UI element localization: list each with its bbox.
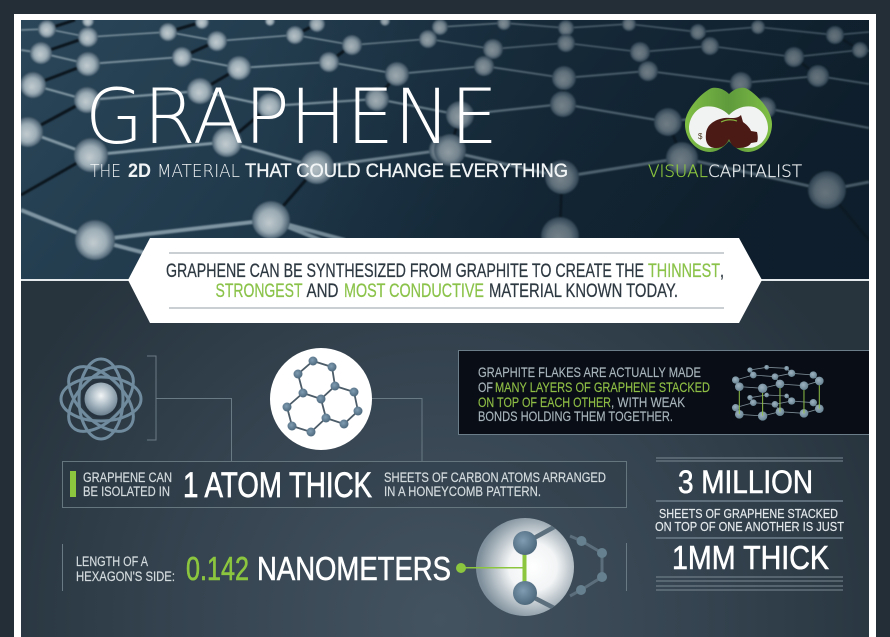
stat: 0.142 nanometers: NANOMETERS (257, 550, 451, 587)
subtitle (90, 161, 568, 182)
icon: stacked graphite layers (732, 365, 824, 421)
hexagon side label: HEXAGON'S SIDE: (76, 569, 175, 584)
callout text: ON TOP OF EACH OTHER (478, 394, 611, 410)
banner statement text: MOST CONDUCTIVE (344, 280, 484, 302)
stat: 0.142 nanometers: 0.142 (186, 550, 249, 587)
side rule (62, 543, 626, 591)
divider line (21, 279, 869, 281)
logo: Visual Capitalist binoculars with piggy bank (685, 88, 772, 152)
logo wordmark: VISUAL (648, 162, 708, 182)
stat panel: 3 million sheets: 3 MILLION (678, 464, 813, 500)
stat panel: 3 million sheets: ON TOP OF ONE ANOTHER IS JUST (655, 519, 844, 534)
box: 1 atom thick (62, 462, 626, 508)
stat panel: 3 million sheets (655, 458, 844, 590)
stat: 0.142 nanometers (186, 550, 451, 587)
pointer: measurement line and dot (456, 563, 523, 573)
right label: IN A HONEYCOMB PATTERN. (384, 484, 541, 499)
banner (128, 238, 762, 323)
right label (384, 470, 606, 499)
hexagon side label: LENGTH OF A (76, 554, 148, 569)
callout text: , WITH WEAK (611, 394, 686, 410)
banner statement text: THINNEST (648, 260, 720, 282)
green accent bar (70, 471, 76, 497)
connector: honeycomb to thickness box (372, 398, 422, 461)
banner statement text: STRONGEST (216, 280, 303, 302)
stat panel: 3 million sheets: SHEETS OF GRAPHENE STACKED (659, 506, 838, 521)
right label: SHEETS OF CARBON ATOMS ARRANGED (384, 470, 606, 485)
icon: magnified carbon bond lens (476, 518, 574, 616)
callout: graphite flakes (458, 350, 869, 434)
subtitle: MATERIAL (157, 161, 240, 182)
big stat: 1 ATOM THICK (183, 466, 372, 505)
title: GRAPHENE (85, 72, 498, 161)
callout text: BONDS HOLDING THEM TOGETHER. (478, 408, 673, 424)
icon: honeycomb molecule (270, 348, 372, 450)
subtitle: THAT COULD CHANGE EVERYTHING (245, 161, 568, 182)
logo wordmark: CAPITALIST (708, 162, 803, 182)
left label: GRAPHENE CAN (83, 470, 172, 485)
left label: BE ISOLATED IN (83, 484, 170, 499)
stat panel: 3 million sheets: 1MM THICK (672, 539, 829, 576)
hexagon side label (76, 554, 175, 584)
hero: molecular network photo (13, 15, 869, 280)
banner statement text: AND (306, 280, 338, 302)
callout text: GRAPHITE FLAKES ARE ACTUALLY MADE (478, 364, 701, 380)
connector: atom to thickness box (147, 356, 232, 461)
banner statement text: MATERIAL KNOWN TODAY. (489, 280, 678, 302)
icon: faded hexagon behind lens (570, 536, 607, 596)
logo wordmark (648, 162, 803, 182)
logo: Visual Capitalist binoculars with piggy bank: $ (698, 132, 703, 141)
callout text (478, 364, 710, 424)
banner statement text (166, 260, 724, 302)
subtitle: 2D (128, 161, 151, 182)
banner statement text: GRAPHENE CAN BE SYNTHESIZED FROM GRAPHITE TO CREATE THE (166, 260, 644, 282)
icon: atom (57, 355, 145, 443)
subtitle: THE (90, 161, 121, 182)
banner statement text: , (720, 260, 724, 282)
callout text: MANY LAYERS OF GRAPHENE STACKED (495, 379, 710, 395)
left label (83, 470, 172, 499)
callout text: OF (478, 379, 493, 395)
lower panel background (21, 281, 869, 637)
